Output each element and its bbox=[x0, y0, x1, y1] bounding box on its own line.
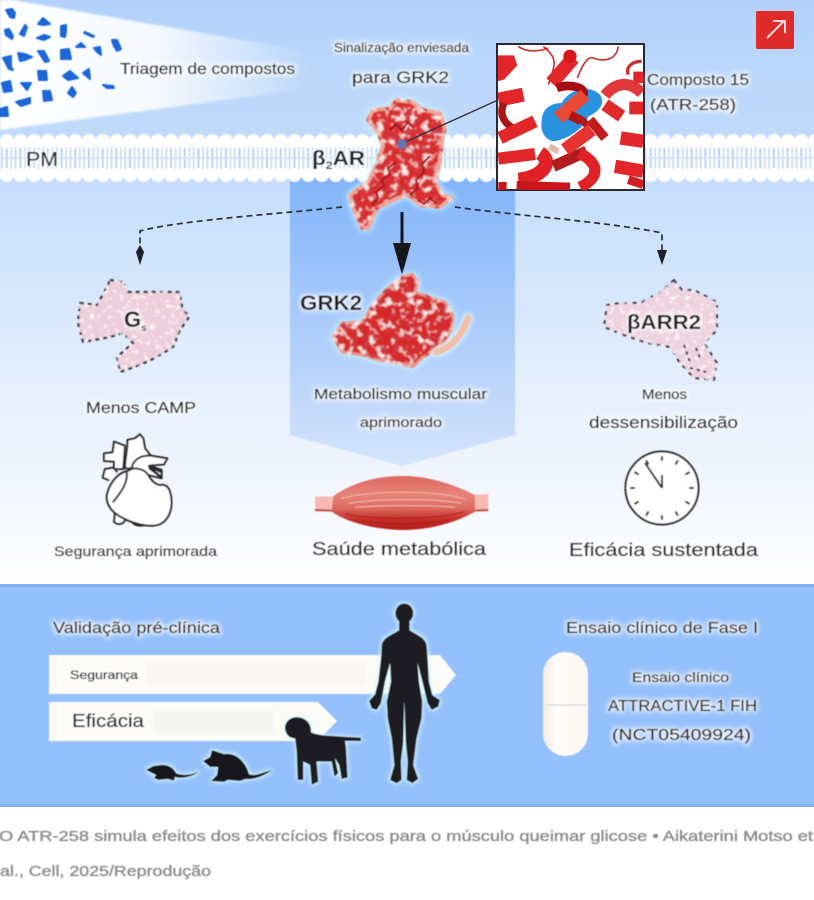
button: expand bbox=[756, 11, 794, 49]
label: NCT number: (NCT05409924) bbox=[612, 727, 751, 744]
inner dashes bbox=[684, 345, 706, 372]
icon: rat bbox=[203, 750, 272, 782]
label: muscle metabolism: Metabolismo muscular bbox=[314, 386, 487, 403]
caption: O ATR-258 simula efeitos dos exercícios físicos para o músculo queimar glicose • Aikaterini Motso et bbox=[0, 829, 813, 845]
protein tail bbox=[436, 318, 468, 352]
panel: validation and trial band bbox=[0, 584, 814, 807]
label: sustained efficacy: Eficácia sustentada bbox=[569, 539, 759, 560]
label: improved: aprimorado bbox=[360, 414, 442, 430]
icon: dog bbox=[285, 717, 361, 785]
label: Gs: G bbox=[124, 307, 141, 332]
protein: beta2 adrenergic receptor bbox=[350, 100, 452, 228]
heading: biased signaling: Sinalização enviesada bbox=[334, 41, 469, 55]
arrow bar: safety bbox=[49, 655, 456, 694]
label: less cAMP: Menos CAMP bbox=[86, 400, 196, 417]
caption bbox=[0, 829, 813, 880]
label: safety: Segurança bbox=[70, 668, 138, 682]
label: beta2 AR: AR bbox=[333, 148, 366, 170]
label: desensitization: dessensibilização bbox=[589, 413, 738, 432]
heading: phase I trial: Ensaio clínico de Fase I bbox=[566, 620, 758, 637]
icon: clock bbox=[626, 452, 698, 524]
label: ATR-258: (ATR-258) bbox=[650, 97, 736, 114]
label: GRK2: GRK2 bbox=[300, 292, 362, 315]
top background panel bbox=[0, 0, 814, 584]
label: less: Menos bbox=[642, 387, 687, 402]
label: improved safety: Segurança aprimorada bbox=[54, 543, 217, 559]
label: beta2 AR: β bbox=[312, 148, 324, 170]
label: Gs: s bbox=[141, 323, 147, 334]
arrow bar: efficacy bbox=[49, 702, 337, 741]
compound screening beam bbox=[0, 0, 312, 130]
inset: compound 15 binding pocket bbox=[497, 44, 644, 190]
leader line to inset bbox=[403, 100, 498, 143]
protein: GRK2 bbox=[333, 274, 468, 367]
protein: beta arrestin 2 bbox=[604, 280, 717, 380]
heading: for GRK2: para GRK2 bbox=[352, 68, 449, 87]
label: compound 15: Composto 15 bbox=[647, 72, 749, 89]
icon: heart bbox=[103, 434, 172, 526]
label: ATTRACTIVE-1 FIH: ATTRACTIVE-1 FIH bbox=[608, 698, 757, 715]
arrow: to GRK2 bbox=[393, 212, 411, 275]
label: PM: PM bbox=[26, 149, 58, 171]
protein: Gs bbox=[78, 280, 189, 372]
compound molecules bbox=[0, 9, 121, 116]
icon: muscle bbox=[315, 476, 488, 530]
caption: al., Cell, 2025/Reprodução bbox=[0, 864, 211, 880]
dashed arrow: to beta arrestin bbox=[455, 207, 667, 265]
heading: preclinical validation: Validação pré-clínica bbox=[53, 620, 220, 637]
label: efficacy: Eficácia bbox=[72, 711, 145, 731]
label: beta ARR2: βARR2 bbox=[627, 312, 701, 334]
icon: mouse bbox=[146, 765, 199, 781]
heading: screening compounds: Triagem de compostos bbox=[120, 61, 295, 78]
label: beta2 AR: 2 bbox=[326, 160, 333, 172]
plasma membrane bbox=[0, 134, 814, 182]
center pathway panel bbox=[290, 172, 515, 466]
icon: pill bbox=[543, 652, 588, 756]
icon: human bbox=[369, 603, 440, 783]
ligand dot in receptor bbox=[397, 139, 407, 149]
label: clinical trial: Ensaio clínico bbox=[632, 670, 729, 685]
dashed arrow: to Gs bbox=[136, 207, 342, 265]
label: metabolic health: Saúde metabólica bbox=[312, 538, 487, 559]
